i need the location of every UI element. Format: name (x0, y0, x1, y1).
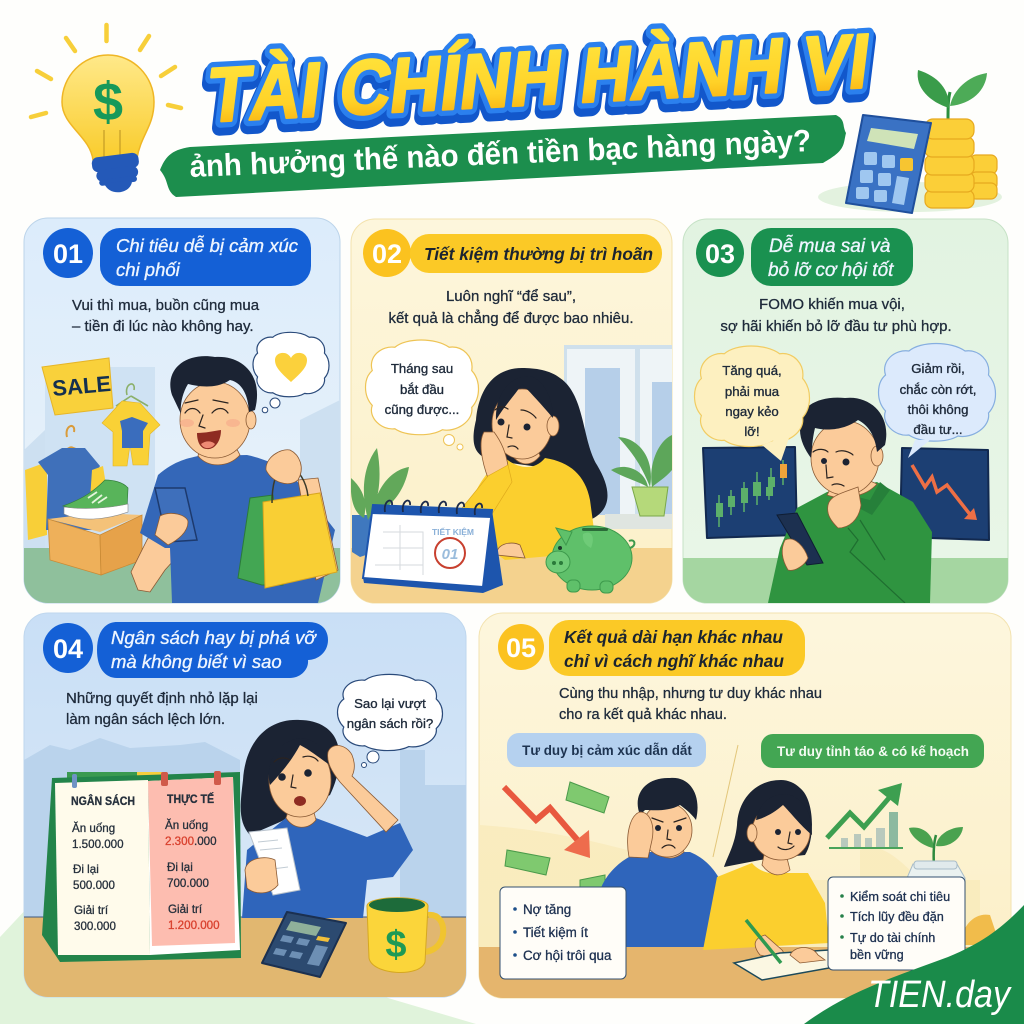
body text 03: FOMO khiến mua vội, (759, 296, 905, 313)
chart screen rising (703, 447, 797, 538)
body text 02: kết quả là chẳng để được bao nhiêu. (388, 309, 634, 327)
heading pill 02: Tiết kiệm thường bị trì hoãn (424, 244, 653, 264)
thought bubble: over budget: Sao lại vượt (354, 696, 426, 711)
body text 03 (720, 296, 952, 335)
heading pill 01: Chi tiêu dễ bị cảm xúc (116, 235, 299, 256)
number badge 01: 01 (53, 239, 83, 269)
icon: falling red arrow (504, 787, 590, 858)
panel 01: emotional spending (24, 218, 340, 604)
heading pill 01: chi phối (116, 259, 181, 280)
logo: TIEN.day: TIEN.day (868, 974, 1012, 1016)
sale sign: SALE (51, 371, 112, 401)
speech bubble: buy now: phải mua (725, 384, 780, 399)
icon: mug with dollar (367, 898, 443, 973)
number badge 02: 02 (372, 239, 402, 269)
list box: planned (828, 877, 965, 970)
number badge 05: 05 (506, 633, 536, 663)
title: Tài chính hành vi: TÀI CHÍNH HÀNH VI (203, 17, 875, 139)
mindset pill: planned: Tư duy tỉnh táo & có kế hoạch (777, 744, 969, 759)
thought bubble: next month: Tháng sau (391, 361, 453, 376)
sale sign (42, 358, 113, 415)
speech bubble: fear: thôi không (908, 402, 968, 417)
scene: backdrop and table (479, 825, 1011, 999)
actual column: 1.200.000 (168, 919, 220, 932)
thought bubble: next month: bắt đầu (400, 382, 444, 397)
heading pill 03: bỏ lỡ cơ hội tốt (768, 260, 894, 281)
number badge 04 (43, 623, 93, 673)
person: thinking man with phone (768, 398, 932, 603)
body text 05: cho ra kết quả khác nhau. (559, 707, 727, 723)
heading pill 03: Dễ mua sai và (769, 236, 890, 257)
person: calm woman (703, 780, 829, 980)
icon: calculator (262, 912, 346, 977)
mindset pill: planned (761, 734, 984, 768)
list box: emotional: Nợ tăng (523, 902, 571, 917)
icon: light bulb with dollar (31, 25, 181, 195)
body text 01 (72, 297, 260, 335)
list box: planned: Kiểm soát chi tiêu (850, 890, 950, 904)
heading pill 04: mà không biết vì sao (111, 651, 282, 672)
mindset pill: emotional (507, 733, 706, 767)
icon: shoe on box (48, 480, 142, 575)
body text 01: – tiền đi lúc nào không hay. (72, 318, 254, 335)
heading pill 05 (549, 620, 805, 676)
speech bubble: fear: chắc còn rớt, (900, 382, 976, 397)
chart screen falling (900, 448, 989, 540)
panel 04: budget broken (24, 613, 466, 998)
list box: planned: bền vững (850, 948, 904, 962)
budget column: Ăn uống (72, 822, 115, 835)
heading pill 04: Ngân sách hay bị phá vỡ (111, 627, 317, 648)
number badge 04: 04 (53, 634, 83, 664)
budget column: 500.000 (73, 879, 115, 892)
heading pill 02 (410, 234, 662, 273)
speech bubble: fear: Giảm rồi, (911, 361, 965, 376)
icon: desk calendar (363, 501, 503, 593)
thought bubble: over budget (338, 674, 442, 768)
actual column: 700.000 (167, 877, 209, 890)
icon: desk calendar: TIẾT KIỆM (432, 526, 474, 537)
panel 03: FOMO and fear (683, 219, 1008, 604)
panel 02: saving delayed (351, 219, 672, 604)
person: worried woman (462, 368, 607, 560)
budget notebook (42, 771, 241, 962)
thought bubble: over budget: ngân sách rồi? (347, 716, 433, 731)
icon: shopping bags (238, 450, 337, 588)
scene: window, plants and table (351, 345, 672, 604)
icon: calculator, coins and plant (818, 70, 1002, 213)
speech bubble: buy now: ngay kẻo (725, 404, 779, 419)
number badge 03: 03 (705, 239, 735, 269)
number badge 03 (696, 229, 744, 277)
body text 04 (66, 690, 258, 728)
icon: desk calendar: 01 (442, 546, 458, 563)
speech bubble: buy now: lỡ! (744, 424, 760, 439)
person: happy man with bags (131, 356, 338, 603)
body text 04: Những quyết định nhỏ lặp lại (66, 690, 258, 707)
speech bubble: buy now: Tăng quá, (722, 363, 782, 378)
list box: planned: Tích lũy đều đặn (850, 910, 944, 924)
icon: green piggy bank (546, 526, 634, 593)
number badge 05 (498, 624, 544, 670)
actual column (165, 793, 220, 932)
subtitle ribbon: ảnh hưởng thế nào đến tiền bạc hàng ngày? (189, 123, 812, 184)
logo: TIEN.day (804, 905, 1024, 1024)
thought bubble: next month: cũng được... (385, 402, 459, 417)
floor (683, 558, 1008, 604)
list box: emotional: Tiết kiệm ít (523, 925, 588, 940)
actual column: Ăn uống (165, 819, 208, 832)
icon: jar with sprout (907, 827, 965, 950)
icon: gold coin pouch (960, 915, 1000, 945)
title block (31, 17, 1002, 213)
budget column: 1.500.000 (72, 838, 124, 851)
pale green corner (0, 905, 476, 1024)
divider (713, 745, 738, 857)
body text 05: Cùng thu nhập, nhưng tư duy khác nhau (559, 686, 822, 702)
budget column (71, 795, 135, 933)
thought bubble: next month (366, 340, 478, 450)
number badge 02 (363, 229, 411, 277)
heading pill 04 (97, 622, 328, 678)
list box: planned: Tự do tài chính (850, 931, 935, 945)
heading pill 03 (751, 228, 913, 286)
scene: skyline and table (24, 738, 466, 998)
speech bubble: buy now (694, 346, 810, 461)
body text 04: làm ngân sách lệch lớn. (66, 711, 225, 728)
title: Tài chính hành vi: TÀI CHÍNH HÀNH VI (202, 22, 874, 144)
mindset pill: emotional: Tư duy bị cảm xúc dẫn dắt (522, 743, 692, 758)
title: Tài chính hành vi: TÀI CHÍNH HÀNH VI (203, 17, 875, 139)
icon: mug with dollar: $ (385, 924, 407, 966)
scene: shop (24, 367, 340, 604)
actual column: THỰC TẾ (167, 793, 214, 806)
actual column: Đi lại (167, 861, 193, 874)
icon: rising green arrow and bars (827, 783, 903, 848)
budget column: NGÂN SÁCH (71, 795, 135, 808)
person: shocked woman (241, 720, 413, 918)
panel 05: long-term results (479, 613, 1011, 999)
budget column: Đi lại (73, 863, 99, 876)
speech bubble: fear: đầu tư... (913, 422, 963, 437)
budget column: 300.000 (74, 920, 116, 933)
speech bubble: fear (878, 344, 996, 458)
body text 05 (559, 686, 822, 723)
number badge 01 (43, 228, 93, 278)
body text 02 (388, 288, 634, 327)
body text 02: Luôn nghĩ “để sau”, (446, 288, 576, 305)
budget column: Giải trí (74, 904, 109, 917)
actual column: 2.300.000 (165, 835, 217, 848)
body text 01: Vui thì mua, buồn cũng mua (72, 297, 260, 314)
heading pill 05: Kết quả dài hạn khác nhau (564, 627, 783, 647)
thought bubble: heart (253, 332, 329, 413)
heading pill 01 (100, 228, 311, 286)
list box: emotional (500, 887, 626, 979)
list box: emotional: Cơ hội trôi qua (523, 948, 612, 963)
icon: light bulb with dollar: $ (93, 72, 123, 132)
heading pill 05: chỉ vì cách nghĩ khác nhau (564, 651, 784, 671)
person: stressed man (597, 778, 720, 947)
body text 03: sợ hãi khiến bỏ lỡ đầu tư phù hợp. (720, 318, 952, 335)
actual column: Giải trí (168, 903, 203, 916)
icon: green banknotes (505, 782, 609, 890)
